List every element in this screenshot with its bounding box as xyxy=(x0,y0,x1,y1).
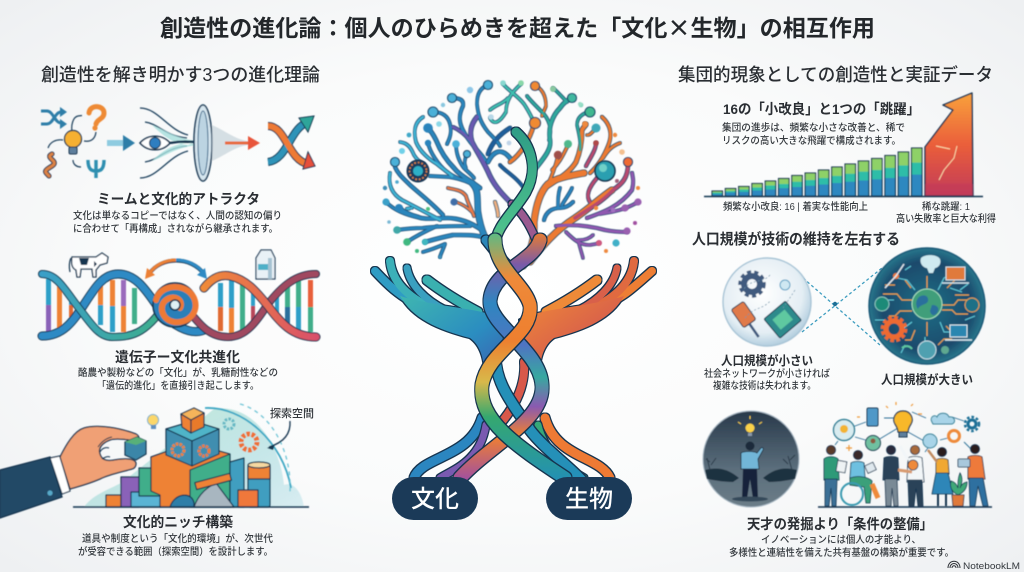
text: meme description: 文化は単なるコピーではなく、人間の認知の偏り xyxy=(73,209,282,222)
label: small population xyxy=(704,353,830,392)
left column heading: 創造性を解き明かす3つの進化理論 xyxy=(41,65,320,85)
text: meme description xyxy=(73,209,282,235)
icon: cultural niche construction xyxy=(0,404,309,518)
pill: biology: 生物 xyxy=(565,486,613,513)
right hand xyxy=(519,261,652,372)
icon: collaborating team with network xyxy=(818,402,992,507)
heading: gene-culture coevolution: 遺伝子ー文化共進化 xyxy=(115,349,240,365)
label: small population: 人口規模が小さい xyxy=(721,353,813,368)
text: progress description xyxy=(722,121,905,147)
label: rare leap: 高い失敗率と巨大な利得 xyxy=(896,212,996,225)
label: rare leap xyxy=(896,200,996,225)
central illustration: tree with intertwined strands and hands xyxy=(375,80,652,520)
icon: small population bubble xyxy=(723,258,811,346)
title: 創造性の進化論：個人のひらめきを超えた「文化×生物」の相互作用 xyxy=(160,9,875,43)
network links xyxy=(835,412,972,452)
heading: 16 small improvements and 1 leap: 16の「小改良」と1つの「跳躍」 xyxy=(723,101,920,117)
heading: conditions over genius: 天才の発掘より「条件の整備」 xyxy=(747,516,933,532)
text: progress description: 集団の進歩は、頻繁な小さな改善と、稀で xyxy=(722,121,905,134)
intertwined strand one xyxy=(460,240,542,478)
label: rare leap: 稀な跳躍: 1 xyxy=(922,200,970,213)
panel: right column, creativity as collective phenomenon xyxy=(678,64,996,559)
logo: NotebookLM: NotebookLM xyxy=(963,561,1020,572)
right column heading: 集団的現象としての創造性と実証データ xyxy=(678,64,993,85)
left hand xyxy=(375,261,505,372)
pill: culture: 文化 xyxy=(411,486,459,513)
pill: biology xyxy=(546,477,632,520)
text: coevolution description: 「遺伝的進化」を直接引き起こします。 xyxy=(97,379,259,392)
icon: gene-culture DNA helix xyxy=(42,250,316,337)
text: meme description: に合わせて「再構成」されながら継承されます。 xyxy=(73,222,278,235)
heading: meme and cultural attractor: ミームと文化的アトラクタ xyxy=(97,191,260,207)
icon: meme attractor illustration xyxy=(41,105,315,181)
icon: biology node xyxy=(595,161,615,181)
upper trunks into canopy xyxy=(486,204,540,268)
text: conditions description xyxy=(729,533,954,559)
text: niche description: が受容できる範囲（探索空間）を設計します。 xyxy=(78,545,273,558)
blocks stack xyxy=(106,408,270,507)
label: frequent small improvements: 頻繁な小改良: 16 | 着実な性能向上 xyxy=(723,200,868,213)
text: conditions description: イノベーションには個人の才能より、 xyxy=(761,533,921,546)
arrows: culture-gene exchange xyxy=(145,260,207,279)
icon: hand placing block xyxy=(0,426,146,518)
text: progress description: リスクの高い大きな飛躍で構成されます。 xyxy=(722,134,901,147)
label: small population: 社会ネットワークが小さければ xyxy=(704,367,830,380)
panel: left column, three evolutionary theories xyxy=(0,65,320,558)
text: niche description: 道具や制度という「文化的環境」が、次世代 xyxy=(82,532,273,545)
label: search space: 探索空間 xyxy=(270,406,314,420)
icon: cow xyxy=(69,253,108,277)
pill: culture xyxy=(392,477,478,520)
figures xyxy=(824,444,988,506)
intertwined strand two, upper branch xyxy=(495,132,532,245)
heading: cultural niche construction: 文化的ニッチ構築 xyxy=(123,514,233,530)
roots and back strands xyxy=(414,355,610,490)
heading: population size and technology: 人口規模が技術の維持を左右する xyxy=(692,230,900,248)
label: small population: 複雑な技術は失われます。 xyxy=(713,379,816,392)
text: niche description xyxy=(78,532,273,558)
label: large population: 人口規模が大きい xyxy=(881,372,973,387)
tree canopy branches, left (blue) xyxy=(386,84,638,266)
text: conditions description: 多様性と連結性を備えた共有基盤の構築が重要です。 xyxy=(729,546,954,559)
connector: dashed lines between population circles xyxy=(802,268,882,345)
icon: milk carton xyxy=(256,250,275,279)
text: coevolution description xyxy=(78,366,278,392)
tree canopy nodes xyxy=(382,80,642,259)
icon: large population sphere xyxy=(869,248,985,364)
icon: culture node xyxy=(407,160,429,182)
bar chart: 16 improvements and 1 leap xyxy=(704,93,983,196)
tree canopy branches, right (orange/purple) xyxy=(510,86,620,266)
text: coevolution description: 酪農や製粉などの「文化」が、乳糖耐性などの xyxy=(78,366,278,379)
intertwined strand two xyxy=(482,240,565,478)
icon: lone genius in dark circle xyxy=(703,411,799,507)
